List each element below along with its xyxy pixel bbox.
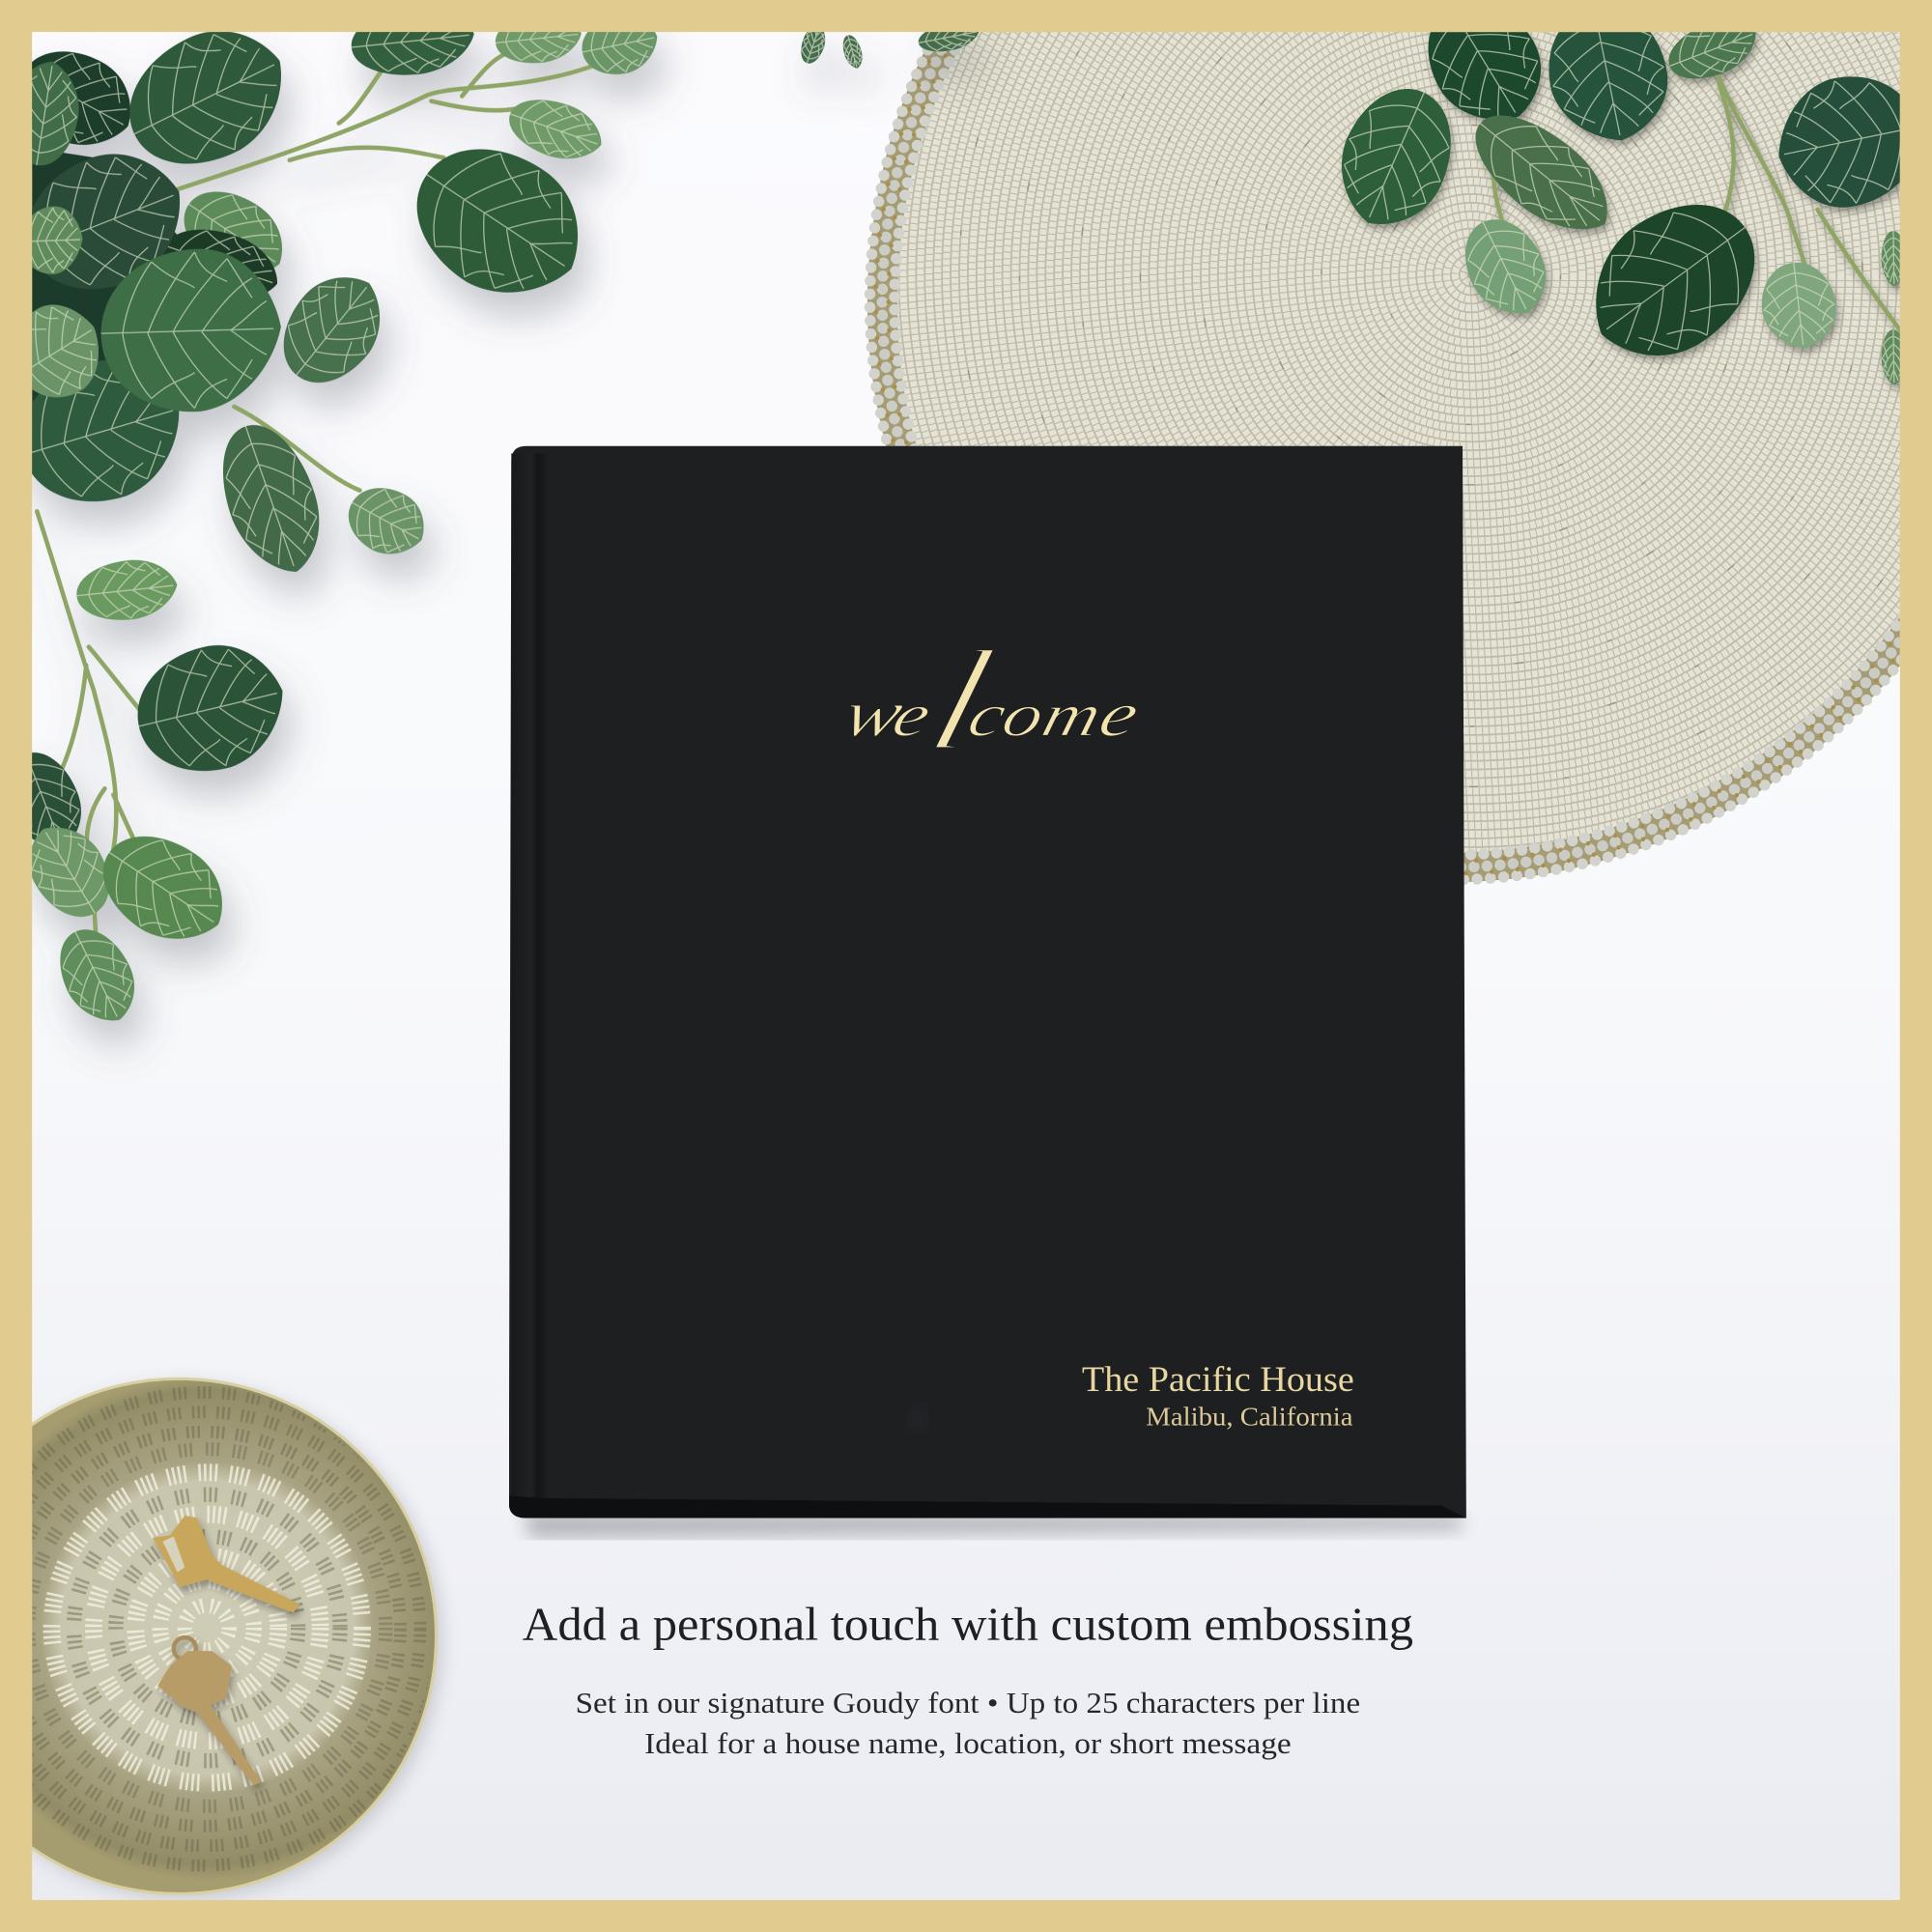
description line one: Set in our signature Goudy font • Up to 25 characters per line xyxy=(576,1687,1360,1719)
foliage, top left xyxy=(0,2,981,1035)
pearl rim xyxy=(870,0,1932,880)
dark cluster base xyxy=(32,153,178,404)
foliage on placemat, top right xyxy=(1340,32,1900,393)
welcome emboss: e xyxy=(1093,679,1147,750)
welcome emboss: w xyxy=(837,677,912,751)
leaves right xyxy=(1340,32,1900,393)
cover smudge xyxy=(908,1406,927,1433)
dish body xyxy=(0,1378,437,1893)
brass dish with keys xyxy=(0,1378,442,1899)
book spine xyxy=(511,453,541,1497)
location emboss: Malibu, California xyxy=(1146,1403,1353,1432)
leaves left xyxy=(0,2,981,1035)
dark bead gaps xyxy=(959,0,1932,786)
welcome emboss: e xyxy=(886,681,938,749)
house name emboss: The Pacific House xyxy=(1082,1359,1354,1399)
dish shadow xyxy=(0,1383,442,1899)
beaded placemat xyxy=(870,0,1932,880)
welcome emboss: m xyxy=(1036,681,1109,749)
heading: Add a personal touch with custom embossing xyxy=(523,1600,1413,1651)
welcome emboss: c xyxy=(961,681,1013,749)
bottom page edge xyxy=(509,1495,1466,1518)
key two xyxy=(157,1637,261,1785)
concentric bead rings xyxy=(896,32,1900,852)
hammered pattern xyxy=(0,1392,440,1865)
welcome emboss: l xyxy=(915,620,1008,781)
stems right xyxy=(1493,76,1904,335)
black embossed book xyxy=(509,446,1466,1518)
key one xyxy=(153,1516,299,1613)
stems left xyxy=(37,43,640,939)
description line two: Ideal for a house name, location, or short message xyxy=(644,1727,1292,1760)
book cover xyxy=(509,446,1466,1518)
welcome emboss: o xyxy=(995,681,1052,749)
book shadow xyxy=(524,1513,1462,1538)
